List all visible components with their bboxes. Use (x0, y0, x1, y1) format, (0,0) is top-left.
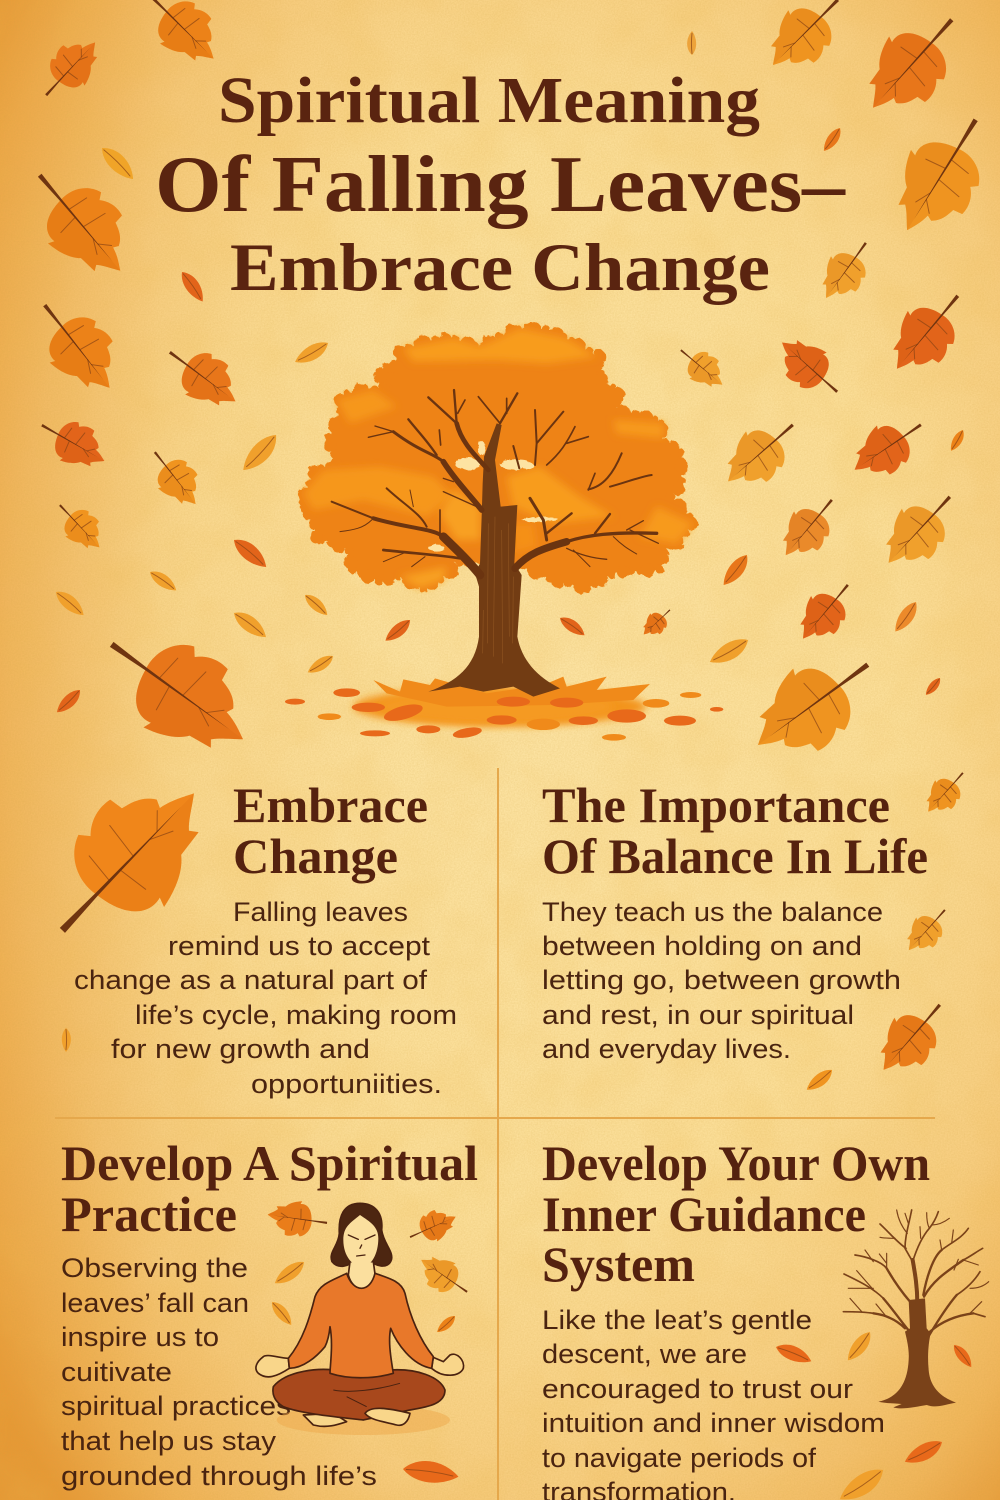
panel: develop your own inner guidance system (542, 1135, 989, 1500)
gaps in the foliage (429, 442, 558, 552)
tree crown (300, 328, 693, 589)
icon: large leaf bottom right of tree (734, 632, 892, 778)
illustration: bare tree (843, 1210, 989, 1408)
panel text: embrace change: for new growth and (111, 1034, 370, 1064)
panel text: embrace change: Falling leaves (233, 897, 408, 927)
panel: the importance of balance in life (542, 762, 975, 1095)
panel text: spiritual practice: cuitivate (61, 1357, 172, 1387)
panel text: spiritual practice: spiritual practices (61, 1391, 291, 1421)
panel text: spiritual practice: inspire us to (61, 1322, 219, 1352)
small leaf in left margin (62, 1028, 71, 1052)
panel text: embrace change (74, 897, 457, 1099)
title: Of Falling Leaves– (155, 141, 846, 229)
leaves beside balance text (803, 762, 975, 1095)
panel text: inner guidance: encouraged to trust our (542, 1374, 853, 1404)
panel text: inner guidance: Like the leat’s gentle (542, 1305, 812, 1335)
panel: develop a spiritual practice (61, 1135, 478, 1491)
panel text: inner guidance: intuition and inner wisdom (542, 1408, 885, 1438)
fallen leaf pile wash (353, 677, 650, 726)
leaves around meditating figure (265, 1197, 477, 1486)
panel: embrace change (21, 754, 457, 1099)
panel heading: spiritual practice (61, 1135, 478, 1242)
panel heading: embrace change (233, 777, 428, 884)
panel text: balance: between holding on and (542, 931, 862, 961)
title: Embrace Change (230, 229, 770, 305)
panel heading: inner guidance: Inner Guidance (542, 1186, 866, 1242)
grid dividers between panels (55, 768, 935, 1500)
icon: large leaf bottom left of tree (83, 605, 272, 779)
panel text: spiritual practice: that help us stay (61, 1426, 277, 1456)
fallen leaves on the ground (285, 688, 723, 741)
panel heading: spiritual practice: Practice (61, 1186, 237, 1242)
panel text: embrace change: change as a natural part of (74, 965, 428, 995)
title (155, 64, 846, 305)
panel text: embrace change: life’s cycle, making room (135, 1000, 457, 1030)
panel text: spiritual practice: leaves’ fall can (61, 1288, 249, 1318)
panel text: embrace change: opportuniities. (251, 1069, 442, 1099)
panel text: inner guidance (542, 1305, 885, 1500)
panel text: spiritual practice: Observing the (61, 1253, 248, 1283)
panel text: balance: They teach us the balance (542, 897, 883, 927)
panel heading: inner guidance: System (542, 1236, 695, 1292)
panel heading: balance (542, 777, 928, 884)
panel text: inner guidance: descent, we are (542, 1339, 747, 1369)
panel text: balance: and everyday lives. (542, 1034, 791, 1064)
panel text: spiritual practice: grounded through life’s (61, 1461, 377, 1491)
tree branches (332, 390, 658, 575)
panel heading: spiritual practice: Develop A Spiritual (61, 1135, 478, 1191)
panel text: balance: and rest, in our spiritual (542, 1000, 854, 1030)
tree trunk (428, 423, 560, 697)
leaves beside inner guidance text (774, 1328, 976, 1500)
panel heading: inner guidance (542, 1135, 930, 1292)
panel text: embrace change: remind us to accept (168, 931, 431, 961)
panel text: balance: letting go, between growth (542, 965, 901, 995)
falling leaves around the title and tree (11, 0, 1000, 717)
illustration: meditating woman (256, 1203, 464, 1435)
illustration: autumn tree (285, 328, 723, 741)
panel text: spiritual practice (61, 1253, 377, 1491)
panel heading: inner guidance: Develop Your Own (542, 1135, 930, 1191)
title: Spiritual Meaning (218, 64, 760, 137)
icon: leaf beside heading (21, 754, 235, 970)
panel heading: embrace change: Change (233, 828, 398, 884)
panel text: inner guidance: to navigate periods of (542, 1443, 817, 1473)
panel heading: embrace change: Embrace (233, 777, 428, 833)
panel heading: balance: Of Balance In Life (542, 828, 928, 884)
panel heading: balance: The Importance (542, 777, 890, 833)
panel text: balance (542, 897, 901, 1064)
